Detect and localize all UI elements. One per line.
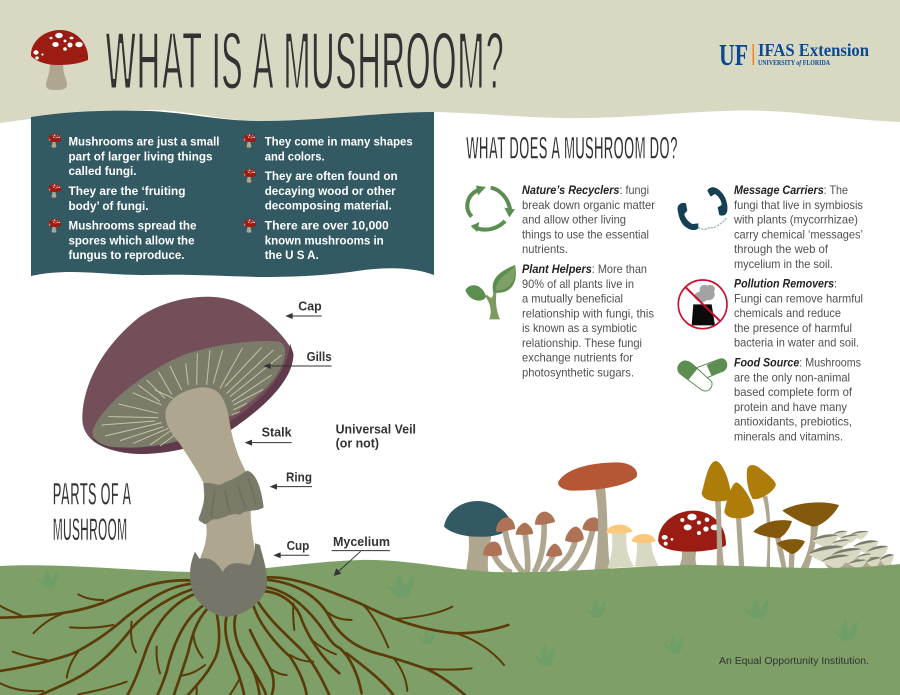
text: plant helpers: a mutually beneficial (522, 292, 623, 306)
fact: shapes (265, 134, 413, 163)
label: universal veil: Universal Veil (336, 423, 416, 437)
text: message carriers: with plants (mycorrhizae) (733, 212, 858, 226)
text: nature's recyclers (522, 183, 655, 256)
label: cap (285, 300, 322, 319)
text: pollution removers: bacteria in water and soil. (734, 336, 859, 350)
text: pollution removers (734, 277, 863, 350)
text: plant helpers: exchange nutrients for (522, 350, 633, 364)
yellow mushrooms (702, 461, 776, 568)
icon: no pollution (678, 280, 727, 329)
grass tufts (36, 569, 858, 666)
text: plant helpers: is known as a symbiotic (522, 321, 637, 335)
text: message carriers (733, 183, 863, 271)
fact: decaying wood: They are often found on (265, 169, 398, 183)
heading: parts of a mushroom (53, 477, 132, 549)
text: nature's recyclers: things to use the essential (522, 227, 649, 241)
mushroom cluster illustration (444, 461, 894, 573)
label: cup: Cup (287, 539, 310, 553)
label: gills: Gills (307, 350, 332, 364)
footer note: An Equal Opportunity Institution. (719, 656, 869, 667)
text: plant helpers (522, 262, 654, 379)
bullet icon (243, 134, 256, 148)
gills (93, 341, 285, 448)
fact: shapes: and colors. (265, 149, 325, 163)
orange tall mushroom (558, 462, 637, 572)
text: nature's recyclers: Nature’s Recyclers: fungi (522, 183, 649, 197)
heading: parts of a mushroom: PARTS OF A (53, 477, 132, 513)
cap (82, 297, 293, 454)
icon: telephone (678, 187, 727, 230)
label: ring: Ring (286, 470, 312, 484)
icon: plant sprout (465, 265, 516, 319)
fact: fruiting body: body’ of fungi. (68, 199, 148, 213)
label: cup (273, 539, 310, 558)
text: plant helpers: relationship. These fungi (522, 336, 642, 350)
text: message carriers: carry chemical ‘messages’ (734, 227, 863, 241)
text: food source: minerals and vitamins. (734, 430, 843, 444)
fact: fruiting body (68, 184, 186, 213)
logo: UF IFAS Extension (719, 37, 869, 72)
bullet icon (243, 219, 256, 233)
text: plant helpers: Plant Helpers: More than (522, 262, 647, 276)
text: pollution removers: the presence of harmful (734, 321, 852, 335)
bullet icon (48, 219, 61, 233)
teal mushroom (444, 501, 513, 572)
bullet icon (48, 134, 61, 148)
icon: recycling arrows (467, 186, 515, 232)
text: message carriers: mycelium in the soil. (734, 257, 833, 271)
fact: decaying wood: decaying wood or other (265, 184, 396, 198)
fact: 10,000: the U S A. (265, 248, 319, 262)
label: universal veil: (or not) (336, 436, 379, 450)
fact: fruiting body: They are the ‘fruiting (68, 184, 186, 198)
label: mycelium (332, 535, 390, 576)
ground (0, 560, 900, 695)
logo: UF IFAS Extension: UF (719, 37, 748, 72)
fact: 10,000: known mushrooms in (265, 234, 384, 248)
fact: spores: Mushrooms spread the (68, 219, 197, 233)
pale mushrooms (606, 525, 659, 568)
label: stalk: Stalk (262, 426, 293, 440)
mushroom anatomy diagram (0, 297, 508, 695)
fact: shapes: They come in many shapes (265, 134, 413, 148)
heading: what does a mushroom do: WHAT DOES A MUSHROOM DO? (466, 131, 678, 167)
header band (0, 0, 900, 123)
icon: header mushroom (31, 30, 88, 90)
label: mycelium: Mycelium (333, 535, 390, 549)
text: pollution removers: chemicals and reduce (734, 306, 841, 320)
icon: capsules (678, 359, 727, 391)
ring (199, 471, 264, 524)
title: WHAT IS A MUSHROOM? (105, 14, 505, 109)
fact: decaying wood (265, 169, 398, 213)
label: ring (270, 470, 312, 490)
stalk (165, 387, 254, 577)
text: nature's recyclers: and allow other living (522, 212, 626, 226)
text: nature's recyclers: nutrients. (522, 242, 568, 256)
mycelium roots (0, 580, 260, 695)
text: plant helpers: relationship with fungi, this (522, 306, 654, 320)
text: pollution removers: Pollution Removers: (734, 277, 837, 291)
label: cap: Cap (298, 300, 322, 314)
text: food source: protein and have many (734, 400, 847, 414)
label: stalk (245, 426, 293, 446)
brown mushroom group (483, 512, 604, 573)
text: plant helpers: photosynthetic sugars. (522, 365, 634, 379)
fact: spores: fungus to reproduce. (68, 248, 184, 262)
fact: small part: Mushrooms are just a small (68, 134, 220, 148)
fact: small part (68, 134, 220, 178)
text: message carriers: fungi that live in symbiosis (734, 198, 863, 212)
fact: 10,000: There are over 10,000 (265, 219, 389, 233)
label: gills (263, 350, 332, 369)
panel: facts (31, 111, 434, 277)
brown flat mushrooms (753, 502, 839, 569)
logo: UF IFAS Extension: UNIVERSITY of FLORIDA (758, 58, 830, 67)
text: message carriers: through the web of (734, 242, 829, 256)
fact: small part: part of larger living things (68, 149, 213, 163)
bullet icon (243, 169, 256, 183)
text: pollution removers: Fungi can remove harmful (734, 292, 863, 306)
text: food source (734, 356, 861, 444)
oyster mushroom cluster (808, 531, 894, 571)
fact: spores (68, 219, 197, 262)
label: universal veil (336, 423, 416, 450)
fact: spores: spores which allow the (68, 234, 195, 248)
cup (190, 543, 267, 617)
heading: parts of a mushroom: MUSHROOM (53, 513, 127, 549)
text: food source: are the only non-animal (734, 370, 850, 384)
text: food source: Food Source: Mushrooms (734, 356, 861, 370)
text: food source: antioxidants, prebiotics, (734, 415, 852, 429)
text: plant helpers: 90% of all plants live in (522, 277, 634, 291)
text: nature's recyclers: break down organic matter (522, 198, 655, 212)
text: food source: based complete form of (734, 385, 853, 399)
fact: small part: called fungi. (68, 164, 136, 178)
text: message carriers: Message Carriers: The (734, 183, 848, 197)
logo: UF IFAS Extension: IFAS Extension (758, 40, 869, 60)
fact: 10,000 (265, 219, 389, 262)
bullet icon (48, 184, 61, 198)
fact: decaying wood: decomposing material. (265, 199, 392, 213)
red spotted mushroom (658, 511, 726, 567)
